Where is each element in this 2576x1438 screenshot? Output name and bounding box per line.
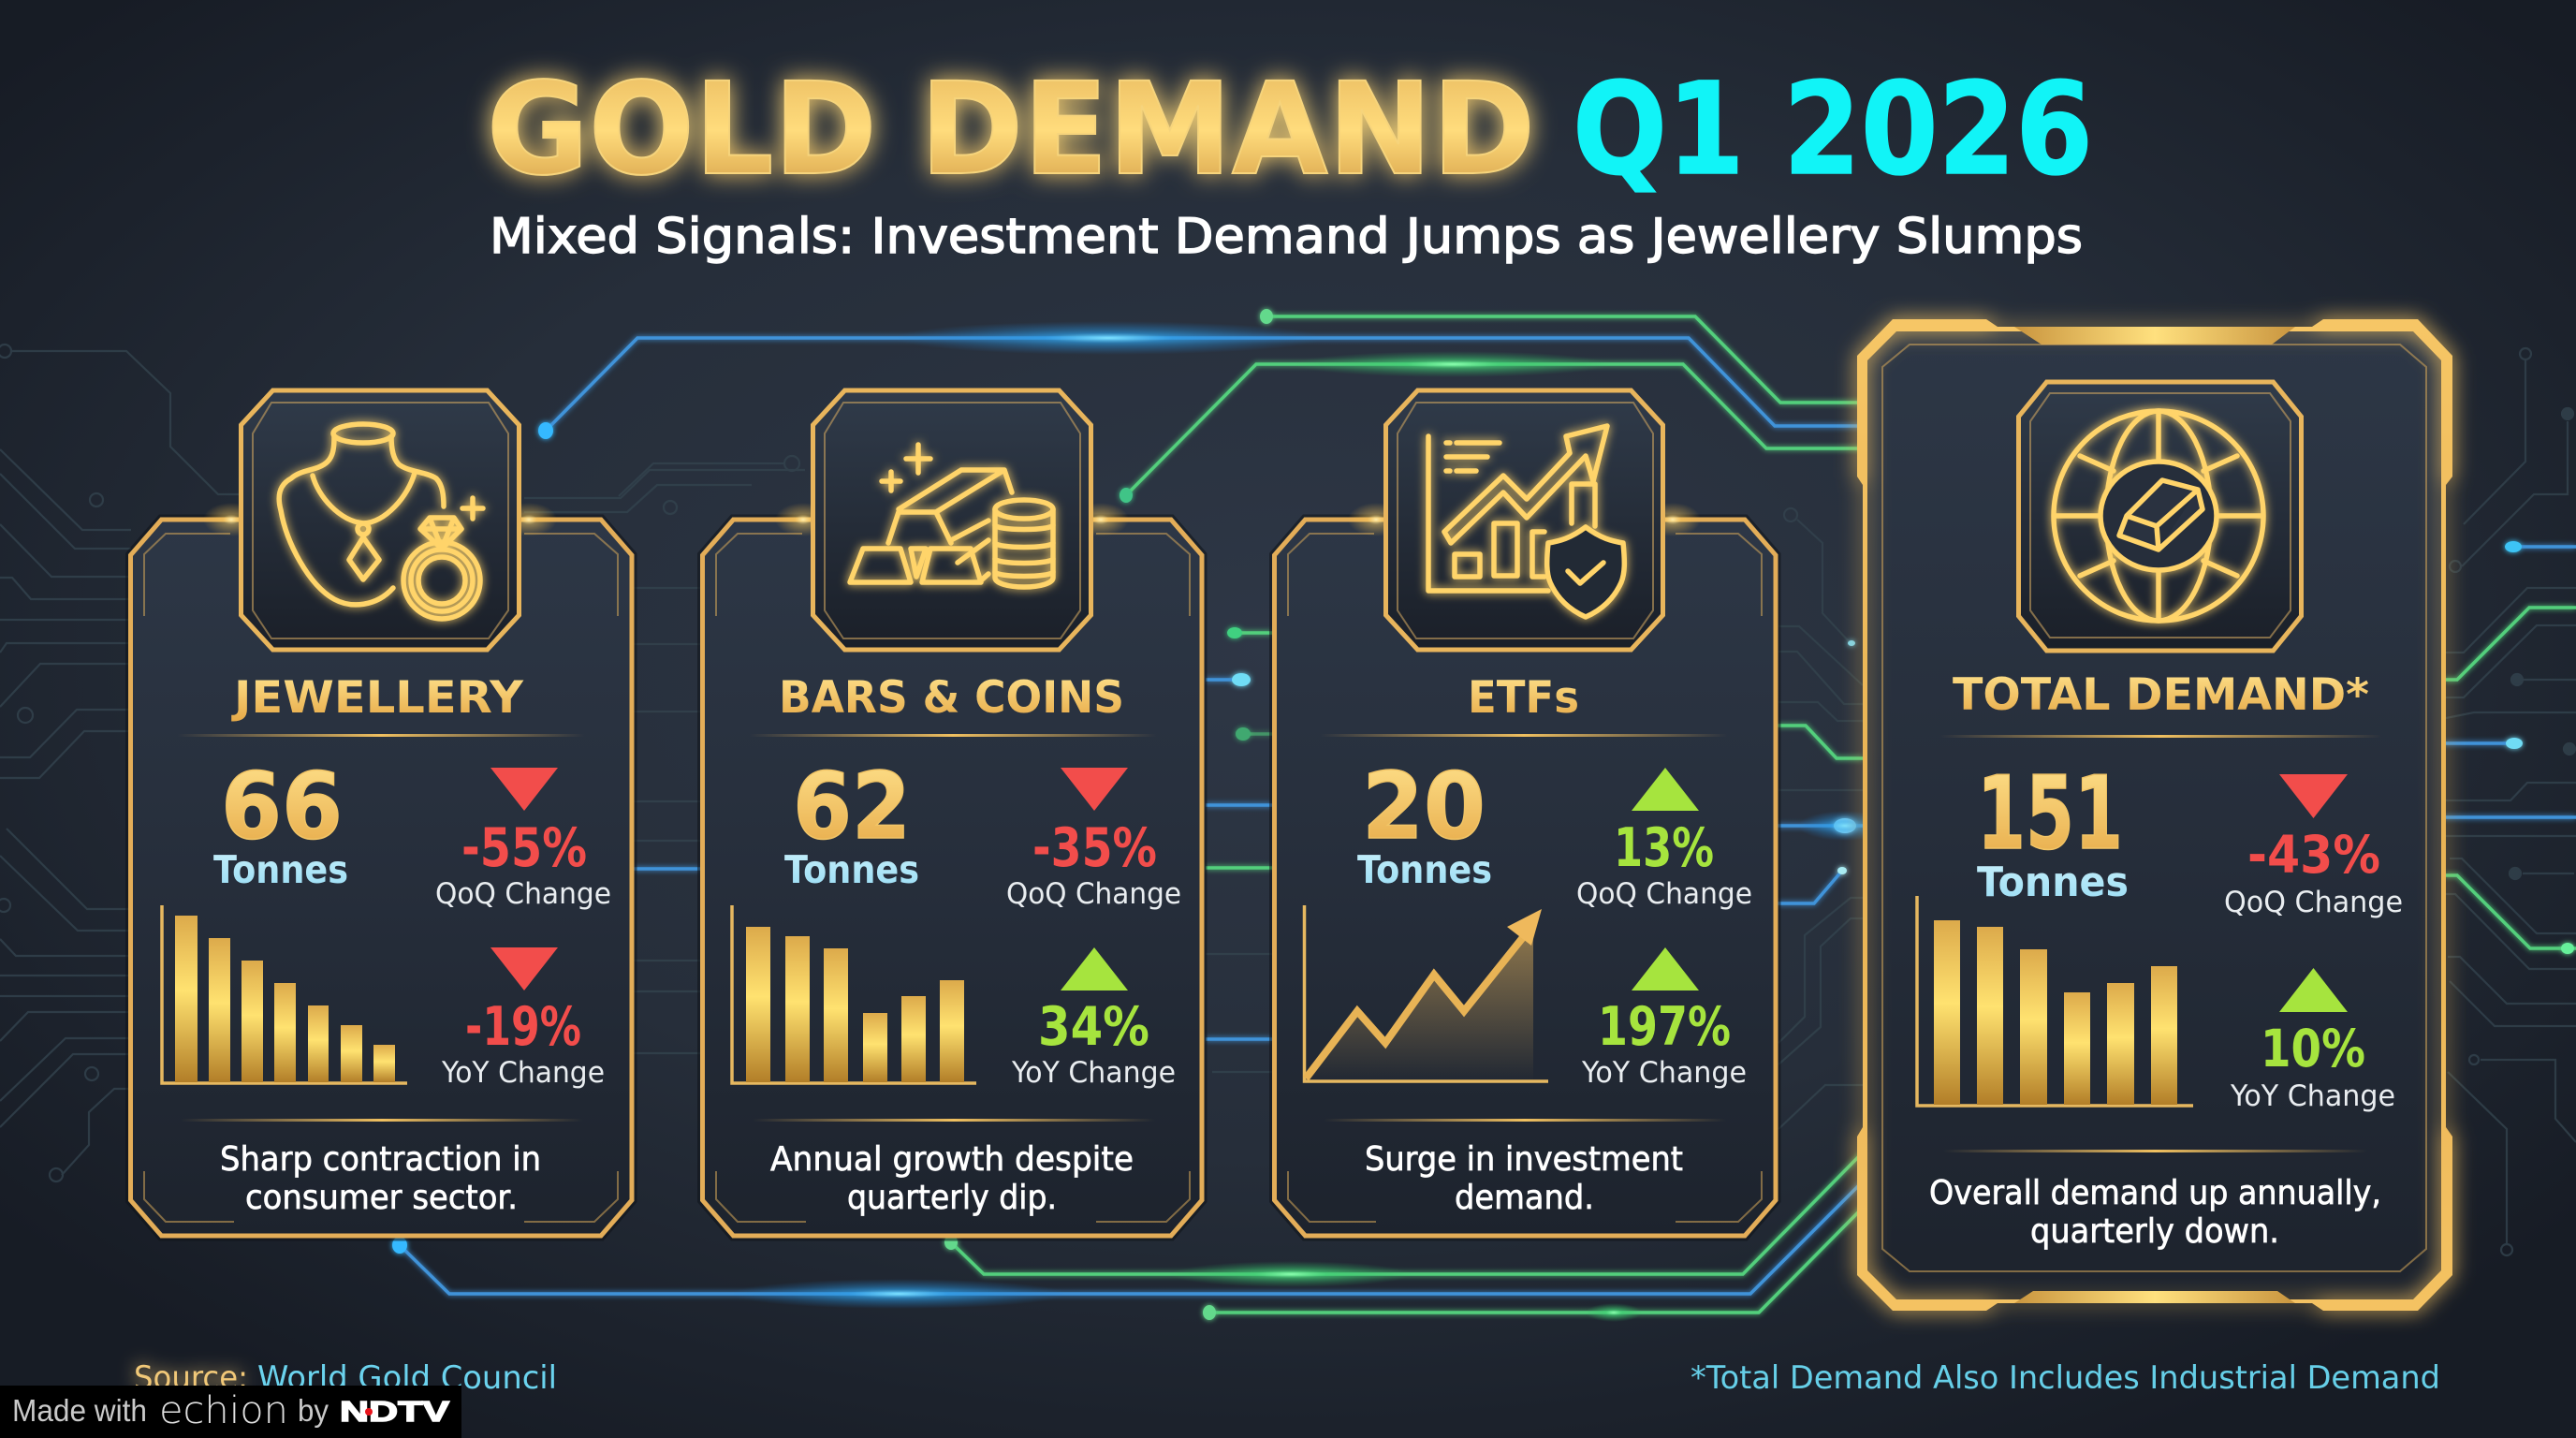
YoY change: YoY Change xyxy=(1581,1056,1747,1090)
description xyxy=(1365,1140,1683,1217)
line chart xyxy=(1305,905,1548,1081)
YoY change: YoY Change xyxy=(2230,1079,2395,1113)
tonnes value: Tonnes xyxy=(213,847,348,892)
card frame xyxy=(131,520,632,1236)
tonnes value: 20 xyxy=(1362,754,1486,860)
QoQ change: QoQ Change xyxy=(1576,877,1752,911)
icon: growth chart and shield xyxy=(1428,426,1624,617)
footnote: *Total Demand Also Includes Industrial Demand xyxy=(1690,1359,2440,1397)
category title: ETFs xyxy=(1468,672,1579,724)
QoQ change: 13% xyxy=(1614,817,1714,879)
panel: jewellery xyxy=(131,390,632,1236)
QoQ change xyxy=(2224,774,2403,919)
source line: World Gold Council xyxy=(257,1359,557,1397)
icon: gold bars and coins xyxy=(850,445,1053,587)
panel: bars and coins xyxy=(702,390,1202,1236)
tonnes value: 151 xyxy=(1977,756,2123,873)
tonnes value: 62 xyxy=(793,754,911,860)
card frame xyxy=(1275,520,1776,1236)
panel: ETFs xyxy=(1275,390,1776,1236)
bar chart xyxy=(732,905,976,1083)
YoY change: -19% xyxy=(465,996,581,1058)
tonnes value: Tonnes xyxy=(1977,858,2129,906)
description: Sharp contraction in xyxy=(220,1140,541,1179)
QoQ change xyxy=(1006,768,1181,911)
YoY change: YoY Change xyxy=(441,1056,605,1090)
watermark bar: NDTV xyxy=(340,1395,449,1428)
watermark bar: Made with xyxy=(12,1393,147,1428)
description: Surge in investment xyxy=(1365,1140,1683,1179)
description xyxy=(1929,1174,2381,1251)
bar chart xyxy=(1917,896,2193,1106)
QoQ change xyxy=(1576,768,1752,911)
QoQ change xyxy=(435,768,611,911)
category title: TOTAL DEMAND* xyxy=(1953,669,2369,721)
YoY change xyxy=(1011,947,1176,1090)
line flares xyxy=(730,321,1892,1322)
panel: total demand xyxy=(1857,319,2452,1311)
icon box xyxy=(812,390,1091,650)
description: Annual growth despite xyxy=(770,1140,1134,1179)
faint circuit background xyxy=(0,345,2576,1255)
QoQ change: QoQ Change xyxy=(2224,886,2403,919)
icon: necklace and ring xyxy=(279,424,483,619)
description: demand. xyxy=(1455,1179,1594,1217)
title: cyan text: Q1 2026 xyxy=(1573,56,2093,204)
YoY change: 34% xyxy=(1038,996,1149,1058)
description: quarterly down. xyxy=(2030,1212,2279,1251)
QoQ change: QoQ Change xyxy=(1006,877,1181,911)
connector lines: blue xyxy=(392,338,2576,1294)
title xyxy=(487,56,2093,204)
watermark bar: by xyxy=(298,1393,329,1428)
highlighted gold frame xyxy=(1857,319,2452,1311)
description: consumer sector. xyxy=(245,1179,518,1217)
watermark bar xyxy=(0,1386,461,1438)
QoQ change: -43% xyxy=(2247,825,2380,885)
description xyxy=(770,1140,1134,1217)
icon box xyxy=(1385,390,1662,650)
source line: Source: xyxy=(134,1359,248,1397)
YoY change xyxy=(441,947,605,1090)
card frame xyxy=(702,520,1202,1236)
connector lines: green xyxy=(944,309,2576,1320)
category title: JEWELLERY xyxy=(231,672,524,724)
bar chart xyxy=(162,905,407,1083)
watermark bar: echion xyxy=(159,1389,288,1432)
QoQ change: QoQ Change xyxy=(435,877,611,911)
description: Overall demand up annually, xyxy=(1929,1174,2381,1212)
title: gold text: GOLD DEMAND xyxy=(487,56,1535,204)
icon box xyxy=(2018,382,2301,651)
QoQ change: -55% xyxy=(461,817,587,879)
tonnes value: Tonnes xyxy=(784,847,919,892)
QoQ change: -35% xyxy=(1032,817,1157,879)
YoY change: YoY Change xyxy=(1011,1056,1176,1090)
tonnes value: 66 xyxy=(221,754,343,860)
icon: globe with gold bar xyxy=(2054,411,2263,621)
tonnes value xyxy=(1977,756,2129,906)
YoY change xyxy=(2230,968,2395,1113)
YoY change: 10% xyxy=(2261,1019,2365,1078)
icon box xyxy=(242,390,519,650)
tonnes value: Tonnes xyxy=(1357,847,1492,892)
description: quarterly dip. xyxy=(847,1179,1057,1217)
subtitle: Mixed Signals: Investment Demand Jumps as Jewellery Slumps xyxy=(490,209,2083,265)
description xyxy=(220,1140,541,1217)
category title: BARS & COINS xyxy=(779,672,1124,724)
YoY change xyxy=(1581,947,1747,1090)
YoY change: 197% xyxy=(1598,996,1731,1058)
